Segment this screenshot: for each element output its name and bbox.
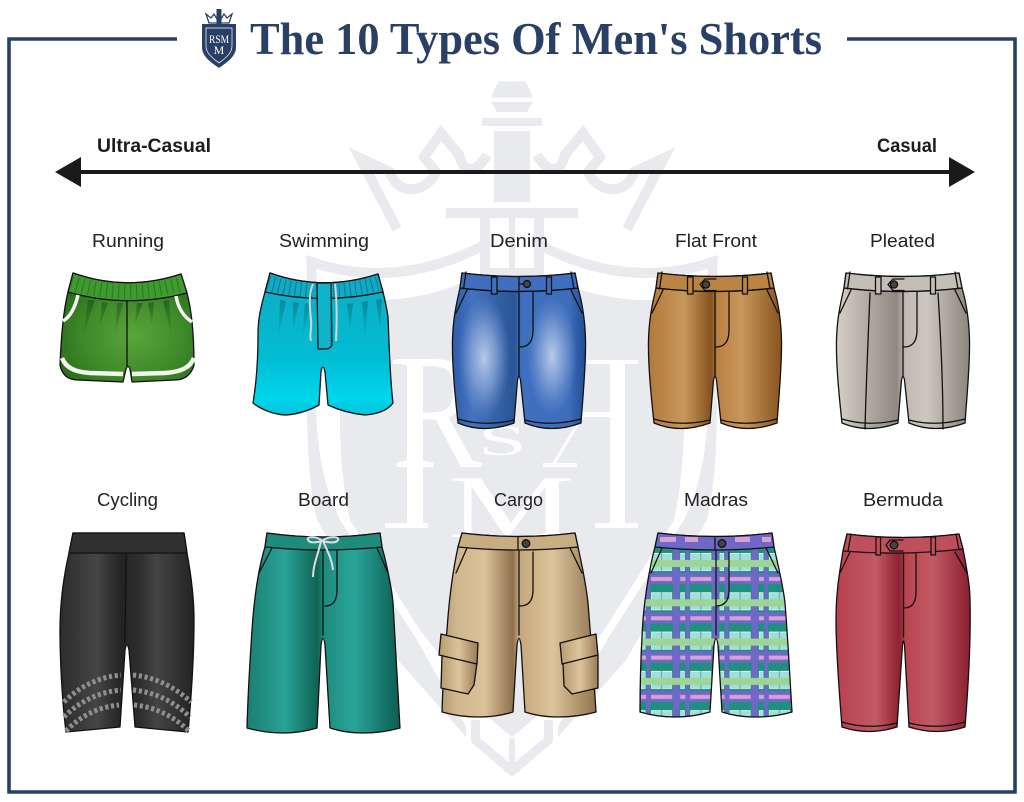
label: flat front: Flat Front [675,230,757,251]
label: pleated: Pleated [870,230,935,251]
shorts: flat front [648,272,782,428]
axis label: casual: Casual [877,136,937,157]
label: cycling: Cycling [97,489,158,510]
shorts: board [247,533,400,733]
shorts: cargo [439,533,598,717]
cargo pocket right [560,634,598,694]
shorts: bermuda [836,534,970,732]
shorts: cycling [60,533,194,732]
logo: crest shield: RSM [209,34,229,46]
cargo pocket left [439,634,478,694]
logo: crest shield: M [214,43,225,57]
logo: crest shield [202,9,236,68]
axis label: ultra-casual: Ultra-Casual [97,136,211,157]
label: running: Running [92,230,164,251]
label: cargo: Cargo [494,489,543,510]
shorts: madras [640,533,792,717]
watermark: RSM crest: R [392,320,483,503]
axis: formality arrow [55,157,975,187]
label: swimming: Swimming [279,230,369,251]
label: madras: Madras [684,489,748,510]
label: board: Board [298,489,349,510]
label: denim: Denim [490,230,548,251]
watermark: RSM crest: M [448,456,575,557]
watermark: RSM crest [307,82,717,777]
label: bermuda: Bermuda [863,489,944,510]
title: The 10 Types Of Men's Shorts [250,13,822,64]
shorts: pleated [836,272,970,429]
watermark: RSM crest: S [478,417,527,464]
shorts: running [60,273,194,382]
shorts: swimming [253,273,393,415]
shorts: denim [452,272,586,428]
